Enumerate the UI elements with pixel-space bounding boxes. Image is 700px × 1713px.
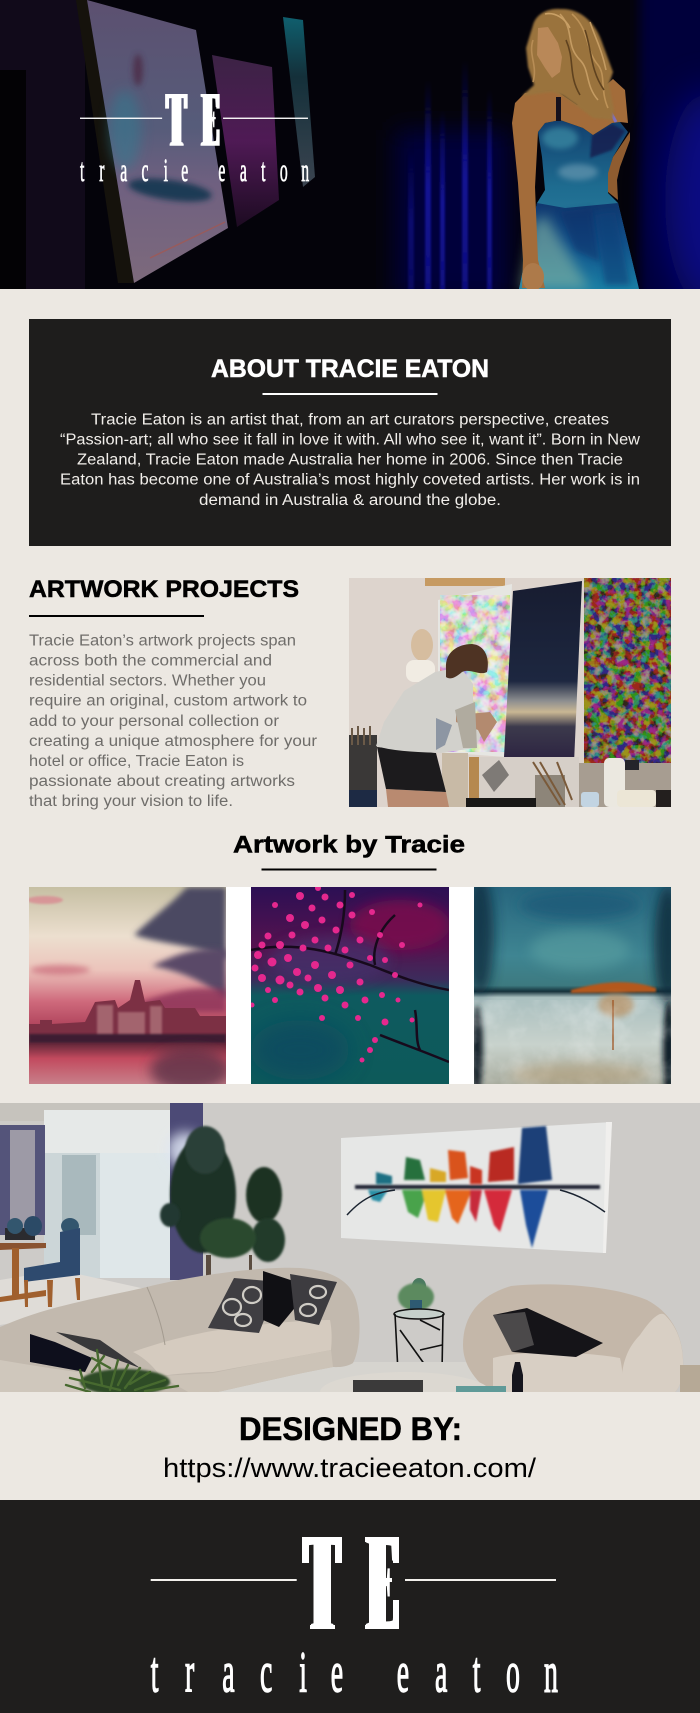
- panel: about: [29, 319, 671, 546]
- hero photo: [0, 0, 700, 289]
- blossoms: [250, 885, 422, 1062]
- heading: artwork by tracie: Artwork by Tracie: [233, 832, 465, 859]
- credit: designed by: DESIGNED BY:: [239, 1411, 462, 1447]
- paragraph: artwork projects: across both the commercial and: [29, 652, 272, 670]
- paragraph: artwork projects: residential sectors. Whether you: [29, 673, 266, 690]
- armchair: [463, 1284, 683, 1393]
- dress: [519, 120, 639, 289]
- about paragraph: Eaton has become one of Australia’s most highly coveted artists. Her work is in: [60, 472, 640, 489]
- hero logo: E: [201, 75, 220, 163]
- about paragraph: “Passion-art; all who see it fall in love it with. All who see it, want it”. Born in New: [60, 431, 641, 448]
- side table: [393, 1278, 445, 1362]
- paragraph: artwork projects: [29, 632, 317, 810]
- figure: artist in painted dress: [512, 9, 639, 291]
- painting: far canvas: [283, 17, 315, 187]
- brushes: [349, 726, 377, 807]
- mannequin: [406, 629, 435, 682]
- white strip behind paintings: [226, 887, 474, 1084]
- about paragraph: Zealand, Tracie Eaton made Australia her home in 2006. Since then Tracie: [77, 452, 623, 469]
- curtains: [0, 1125, 45, 1235]
- hair: [522, 9, 614, 120]
- photo: living room: [0, 1103, 700, 1412]
- about heading: ABOUT TRACIE EATON: [211, 355, 489, 383]
- fern: [66, 1350, 178, 1395]
- ceiling and window wall: [0, 1103, 170, 1121]
- paragraph: artwork projects: add to your personal collection or: [29, 713, 279, 730]
- hero logo: [80, 94, 310, 182]
- wall painting: [341, 1122, 612, 1253]
- face: [537, 27, 562, 78]
- painting: middle canvas: [212, 55, 279, 227]
- paragraph: artwork projects: hotel or office, Tracie Eaton is: [29, 753, 244, 770]
- sofa cushions: [208, 1278, 264, 1333]
- paragraph: artwork projects: passionate about creating artworks: [29, 773, 295, 790]
- painting: abstract horizon: [474, 887, 671, 1084]
- right canvas: [584, 578, 671, 763]
- footer logo: E: [365, 1504, 399, 1660]
- painter: [376, 644, 497, 807]
- about paragraph: Tracie Eaton is an artist that, from an art curators perspective, creates: [91, 411, 609, 428]
- paragraph: artwork projects: creating a unique atmosphere for your: [29, 733, 317, 750]
- footer logo: tracie eaton: [151, 1639, 558, 1704]
- footer logo: T: [302, 1506, 343, 1660]
- left canvas: [438, 584, 512, 757]
- painting: cherry blossom: [250, 885, 450, 1084]
- credit: website: https://www.tracieeaton.com/: [163, 1453, 537, 1483]
- paragraph: artwork projects: Tracie Eaton’s artwork projects span: [29, 632, 296, 649]
- sofa: [0, 1268, 360, 1393]
- dining set: [0, 1216, 80, 1307]
- plants: [160, 1126, 285, 1280]
- paragraph: artwork projects: require an original, custom artwork to: [29, 693, 307, 710]
- bottles: [581, 758, 671, 807]
- hero logo: T: [165, 77, 188, 164]
- floor: [220, 1362, 478, 1392]
- photo: artist at easel: [349, 578, 671, 807]
- hair curls: [532, 14, 608, 108]
- dark canvas: [504, 581, 582, 763]
- painting: large canvas: [76, 0, 228, 283]
- lower wall and easel: [504, 757, 574, 763]
- skyline: [29, 980, 226, 1042]
- about paragraph: demand in Australia & around the globe.: [199, 492, 501, 509]
- about paragraph: [60, 411, 641, 509]
- footer logo: [151, 1504, 558, 1704]
- coffee table: [353, 1362, 523, 1392]
- branches: [251, 890, 449, 1062]
- heading: artwork projects: ARTWORK PROJECTS: [29, 576, 299, 603]
- skin: shoulders and arms: [512, 79, 628, 288]
- footer panel: [0, 1500, 700, 1713]
- hero logo: tracie eaton: [80, 152, 309, 189]
- paragraph: artwork projects: that bring your vision to life.: [29, 793, 233, 810]
- painting: city skyline: [27, 887, 230, 1092]
